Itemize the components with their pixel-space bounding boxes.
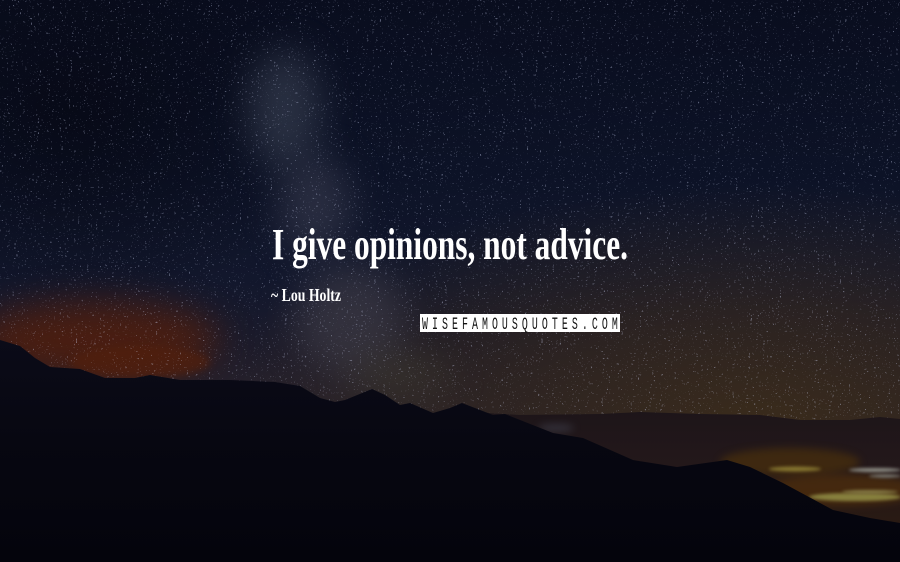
author attribution: ~ Lou Holtz bbox=[271, 285, 341, 305]
far mountain ridge bbox=[470, 412, 900, 530]
watermark badge: WISEFAMOUSQUOTES.COM bbox=[422, 315, 618, 335]
orange horizon glow bbox=[0, 302, 220, 378]
quote text: I give opinions, not advice. bbox=[272, 220, 628, 269]
stars bbox=[0, 0, 900, 430]
foreground mountains silhouette bbox=[0, 340, 900, 562]
milky way bbox=[249, 50, 450, 397]
city lights bbox=[538, 424, 900, 506]
